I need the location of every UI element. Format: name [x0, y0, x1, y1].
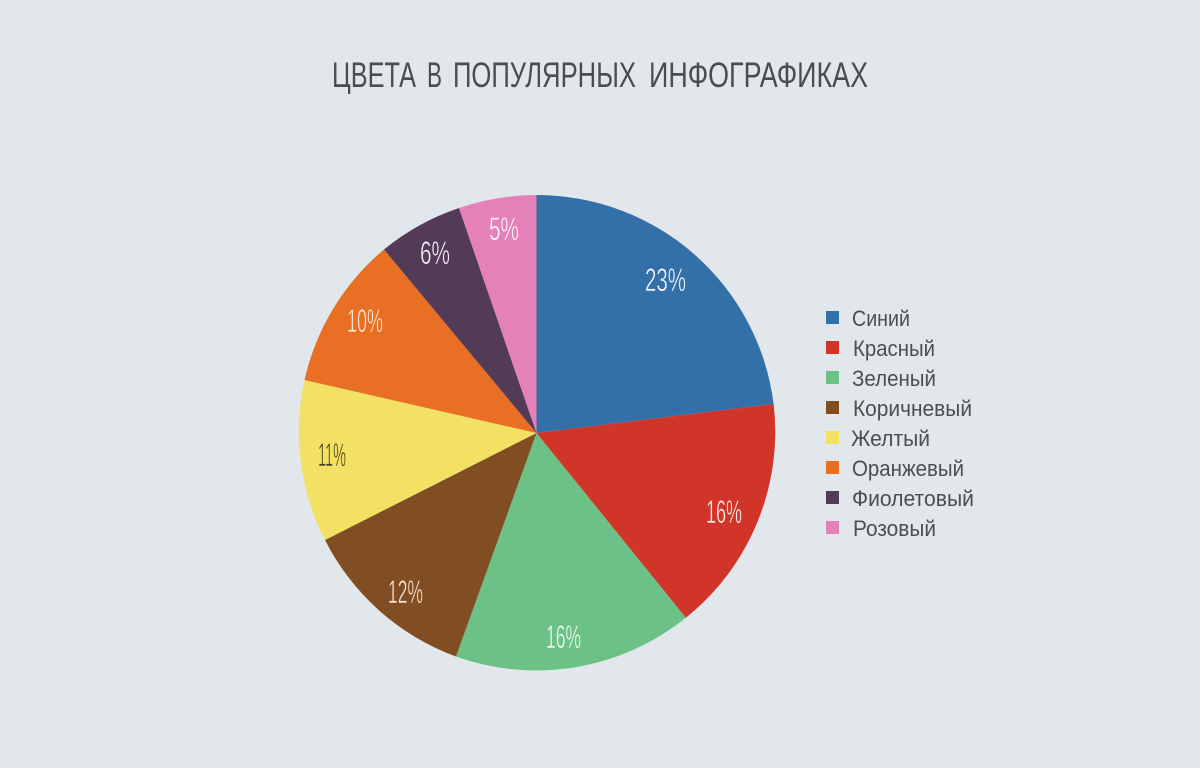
slice: pink 5%: 5% — [489, 211, 519, 247]
legend item: orange: Оранжевый — [852, 456, 964, 481]
slice: purple 6% — [384, 208, 536, 433]
slice: blue 23%: 23% — [645, 262, 686, 298]
legend item: blue: Синий — [852, 306, 910, 331]
slice: green 16%: 16% — [546, 619, 581, 655]
legend item: green: Зеленый — [852, 366, 936, 391]
slice: red 16% — [536, 404, 775, 618]
slice: yellow 11% — [299, 380, 536, 540]
slice: red 16%: 16% — [706, 494, 742, 530]
slice: orange 10%: 10% — [347, 303, 383, 339]
slice: pink 5% — [459, 195, 536, 433]
slice: brown 12%: 12% — [388, 574, 423, 610]
legend item: red: Красный — [853, 336, 935, 361]
legend item: purple: Фиолетовый — [852, 486, 974, 511]
title — [332, 56, 868, 95]
legend item: brown: Коричневый — [853, 396, 972, 421]
slice: yellow 11%: 11% — [318, 437, 346, 473]
title: В — [427, 56, 442, 95]
slice: orange 10% — [304, 250, 536, 433]
slice: blue 23% — [536, 195, 774, 433]
legend item: blue — [826, 306, 910, 331]
title: ИНФОГРАФИКАХ — [649, 56, 868, 95]
slice: brown 12% — [325, 433, 536, 656]
title: ПОПУЛЯРНЫХ — [453, 56, 636, 95]
title: ЦВЕТА — [332, 56, 416, 95]
legend item: pink: Розовый — [853, 516, 936, 541]
legend — [826, 306, 974, 541]
slice: green 16% — [456, 433, 686, 670]
pie chart — [299, 195, 775, 670]
slice: purple 6%: 6% — [420, 235, 450, 271]
legend item: yellow: Желтый — [851, 426, 930, 451]
